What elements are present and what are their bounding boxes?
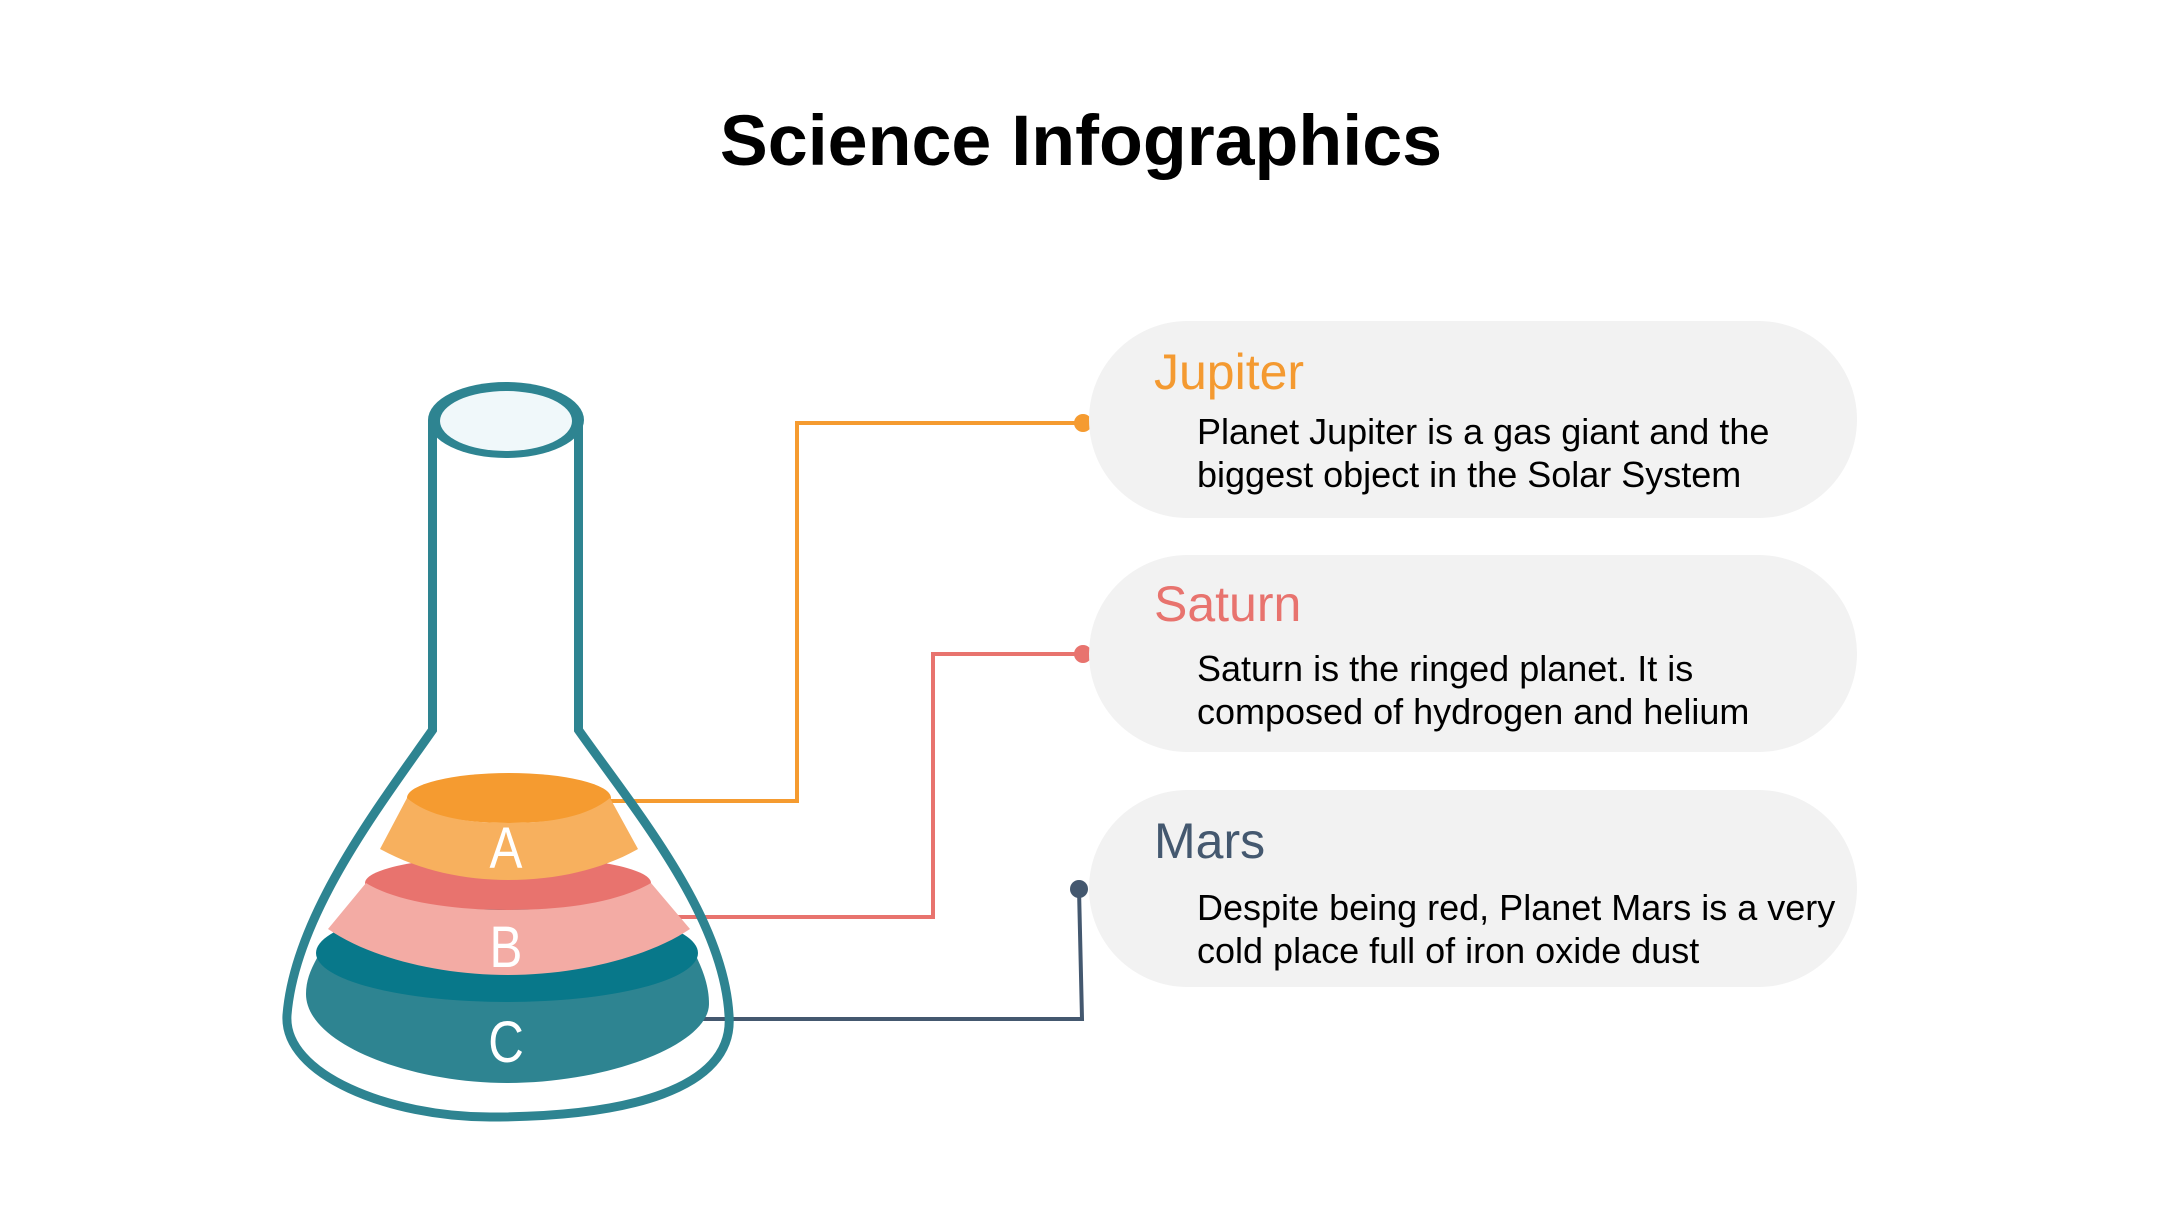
layer A: A <box>490 816 523 881</box>
connector: Saturn <box>670 645 1092 917</box>
heading: Mars: Mars <box>1154 813 1265 869</box>
flask glass outline <box>287 420 729 1117</box>
layer B <box>328 856 690 980</box>
text: Jupiter description: biggest object in the Solar System <box>1197 454 1741 495</box>
heading: Jupiter: Jupiter <box>1154 344 1304 400</box>
panel: Saturn <box>1089 555 1857 752</box>
text: Saturn description: Saturn is the ringed planet. It is <box>1197 648 1693 689</box>
layer A <box>380 773 638 881</box>
text: Mars description: Despite being red, Planet Mars is a very <box>1197 887 1835 928</box>
connector: Jupiter <box>600 414 1092 801</box>
panel: Mars <box>1089 790 1857 987</box>
layer B: B <box>490 915 522 980</box>
layer C <box>306 904 709 1083</box>
connector: Mars <box>700 880 1088 1019</box>
flask rim <box>428 382 584 458</box>
panel: Jupiter <box>1089 321 1857 518</box>
text: Jupiter description: Planet Jupiter is a gas giant and the <box>1197 411 1769 452</box>
text: Saturn description: composed of hydrogen and helium <box>1197 691 1749 732</box>
heading: Saturn: Saturn <box>1154 576 1301 632</box>
layer C: C <box>488 1010 524 1075</box>
text: Mars description: cold place full of iron oxide dust <box>1197 930 1699 971</box>
title: Science Infographics <box>720 101 1442 181</box>
flask opening <box>440 391 572 451</box>
icon: flask <box>287 382 729 1117</box>
